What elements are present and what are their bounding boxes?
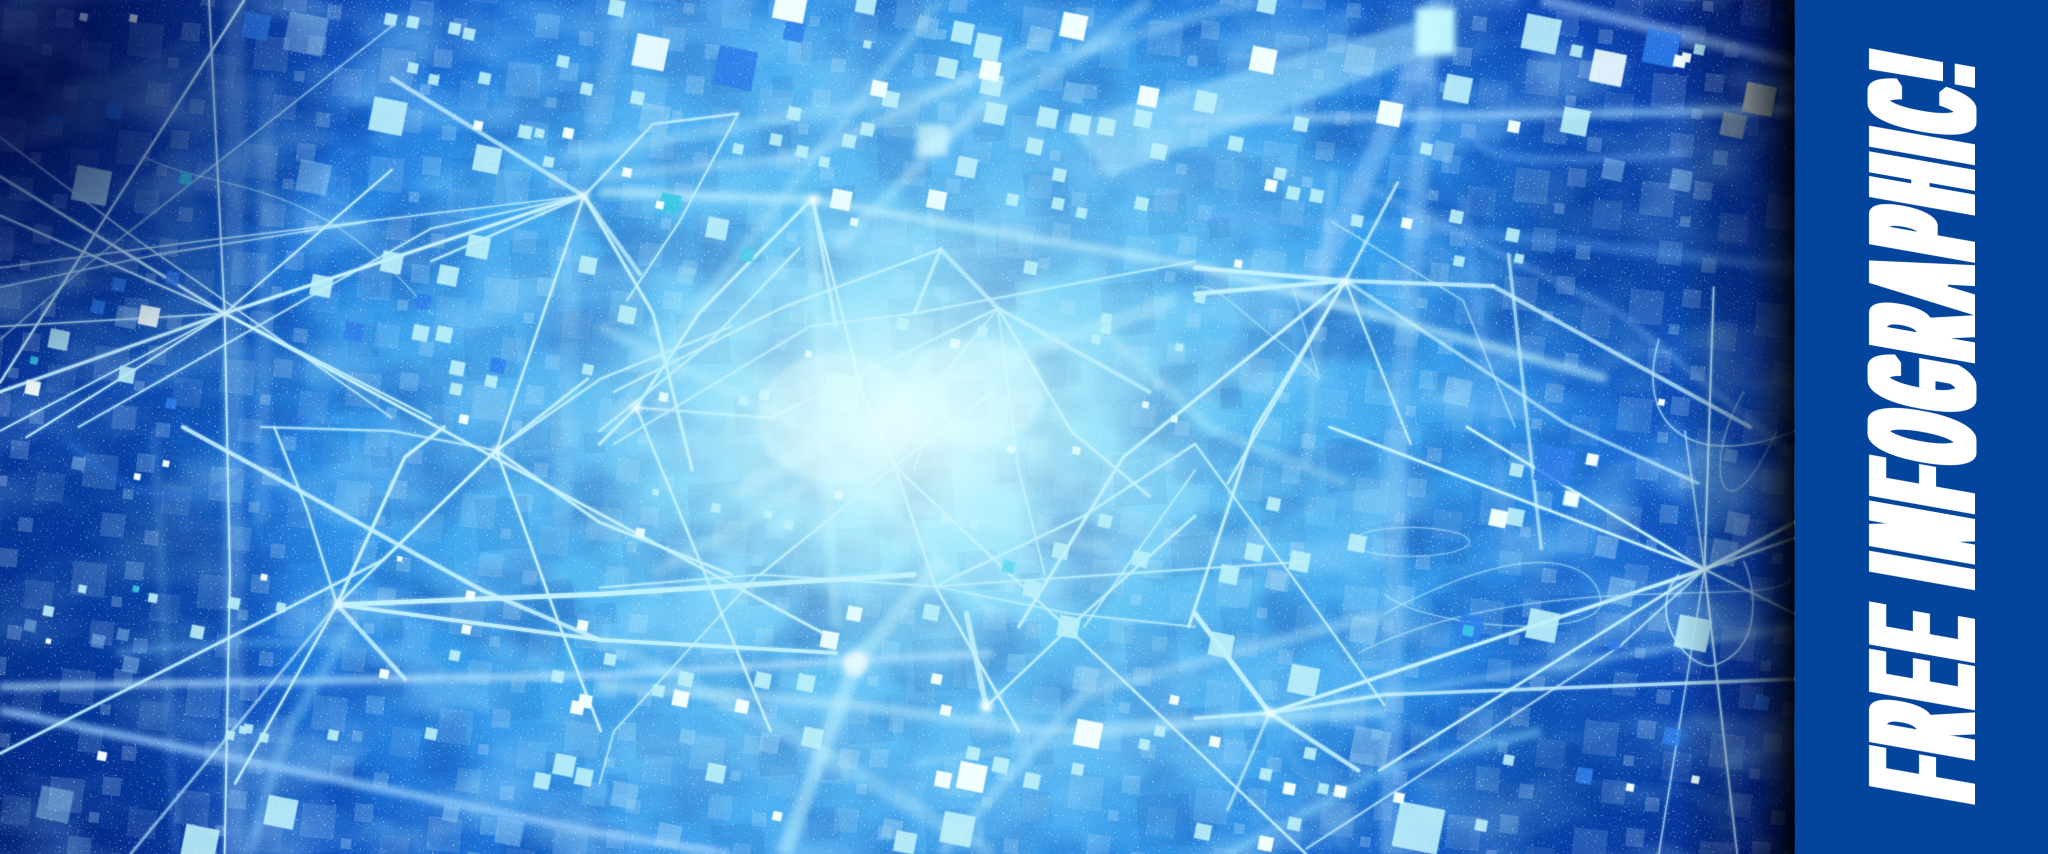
saturated blue squares (54, 26, 1762, 776)
hub flares (221, 8, 1707, 718)
tan squares near right edge (1733, 99, 1759, 125)
panel: solid blue side band (1795, 0, 2048, 854)
bright white squares (33, 5, 1695, 844)
teal accent squares (34, 179, 1468, 631)
pale cyan squares (48, 4, 1699, 844)
central white glow (536, 168, 1267, 680)
